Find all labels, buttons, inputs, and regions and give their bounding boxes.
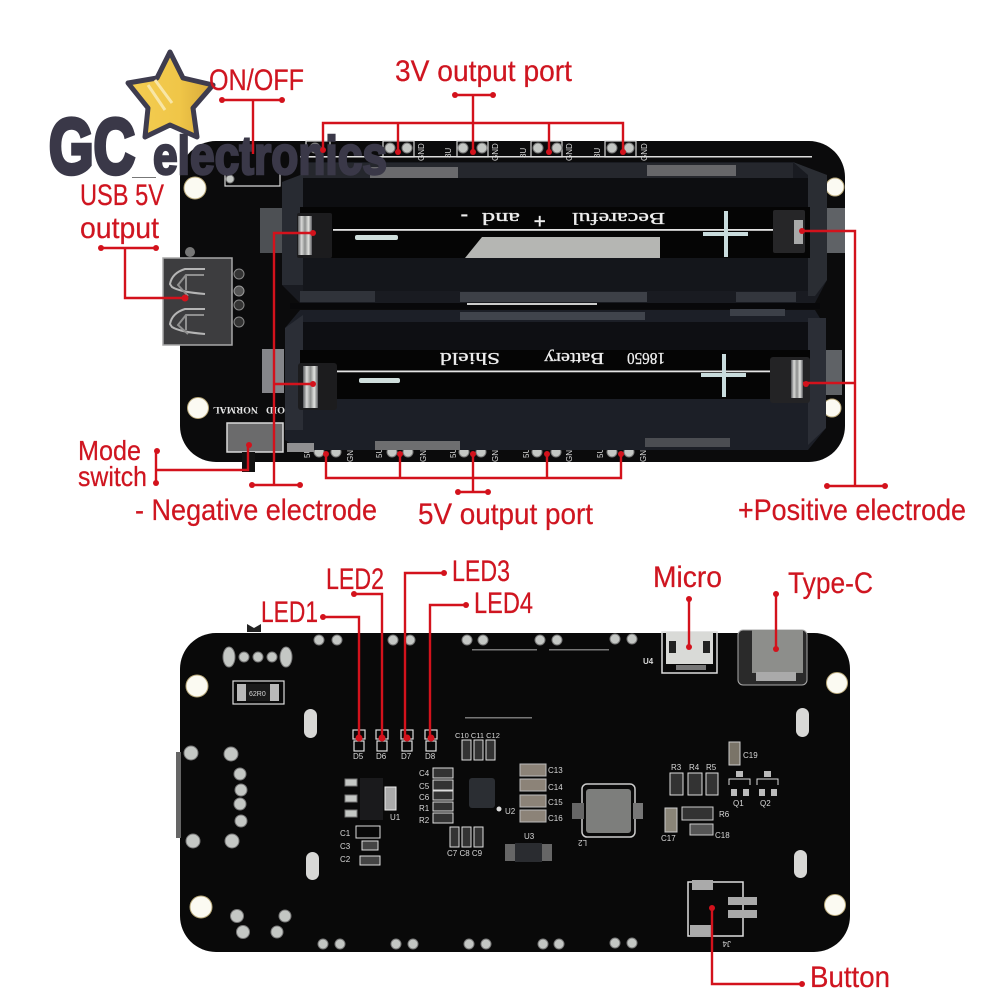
bottom output pads: GND [491, 444, 500, 462]
callout: LED2 [326, 563, 386, 742]
C10 C11 C12 [455, 731, 500, 760]
bottom output pads: GND [419, 444, 428, 462]
U2 QFN chip [469, 778, 516, 816]
C19: C19 [743, 751, 758, 760]
R6 C17 C18: R6 [719, 810, 730, 819]
holder gap [290, 303, 820, 309]
R3 R4 R5: R3 [671, 763, 682, 772]
18650 silk text [439, 349, 665, 368]
through-hole pads left [184, 647, 292, 938]
callout: 3V output port: 3V output port [395, 55, 573, 88]
C4 C5 C6 R1 R2: C5 [419, 782, 430, 791]
becareful silk text [461, 205, 665, 234]
callout: Micro [653, 561, 722, 650]
top output pads: 3U [519, 148, 528, 158]
LEDs D5-D8: D6 [376, 752, 387, 761]
C4 C5 C6 R1 R2: C6 [419, 793, 430, 802]
callout: Type-C: Type-C [788, 567, 873, 600]
C7 C8 C9: C7 C8 C9 [447, 849, 483, 858]
normal silk text: OID [265, 405, 285, 415]
R6 C17 C18: C18 [715, 831, 730, 840]
callout: 5V output port: 5V output port [418, 498, 594, 531]
callout: positive electrode: +Positive electrode [738, 494, 966, 527]
LEDs D5-D8 [353, 730, 437, 761]
callout: LED3: LED3 [452, 555, 510, 588]
top output pads: GND [417, 143, 426, 161]
contact clips [297, 210, 805, 258]
callout: mode switch [78, 435, 252, 492]
J4 button footprint [688, 880, 757, 948]
U3 chip: U3 [524, 832, 535, 841]
bottom output pads: 5U [303, 448, 312, 458]
side USB shell [176, 752, 181, 838]
callout: Button: Button [810, 961, 890, 994]
type-C port [738, 630, 807, 685]
callout: LED4 [428, 587, 533, 742]
LEDs D5-D8: D7 [401, 752, 412, 761]
callout: ON/OFF: ON/OFF [209, 64, 304, 97]
C4 C5 C6 R1 R2: R2 [419, 816, 430, 825]
R3 R4 R5 [670, 763, 718, 795]
callout: USB 5V output: output [80, 212, 160, 245]
C4 C5 C6 R1 R2: R1 [419, 804, 430, 813]
plus mark [703, 211, 748, 257]
C10 C11 C12: C10 C11 C12 [455, 731, 500, 740]
top output pads: 3U [593, 148, 602, 158]
callout: negative electrode [135, 230, 377, 527]
U1 regulator [345, 778, 401, 822]
becareful silk text: Becareful [572, 209, 665, 228]
contact clips [298, 357, 810, 410]
C1 C2 C3 [340, 826, 380, 865]
18650 silk text: Battery [543, 349, 604, 368]
on/off switch outline [225, 172, 280, 186]
bottom output pads: GND [346, 444, 355, 462]
top output pads: 3U [444, 148, 453, 158]
R3 R4 R5: R5 [706, 763, 717, 772]
C13 to C16: C14 [548, 783, 563, 792]
Q1 Q2: Q2 [760, 799, 771, 808]
becareful silk text: and [481, 209, 520, 228]
C19 [729, 742, 758, 765]
U3 chip [505, 832, 552, 862]
micro USB port [643, 632, 717, 673]
PCB top board [180, 141, 845, 462]
micro USB port: U4 [643, 657, 654, 666]
L2 inductor [572, 784, 643, 847]
terminal tabs [260, 208, 845, 395]
bottom output pads: GND [639, 444, 648, 462]
callout: LED1 [261, 596, 362, 742]
U2 QFN chip: U2 [505, 807, 516, 816]
top output pads [300, 141, 812, 161]
18650 silk text: Shield [439, 349, 500, 368]
minus mark [355, 235, 398, 240]
bottom output pads [303, 444, 648, 462]
C13 to C16: C16 [548, 814, 563, 823]
logo: GC electronics watermark [49, 52, 387, 190]
callout: positive electrode [738, 228, 966, 527]
icon: star [128, 52, 213, 137]
bottom output pads: GND [565, 444, 574, 462]
becareful silk text: + [533, 209, 546, 234]
normal silk text [213, 405, 285, 415]
C4 C5 C6 R1 R2: C4 [419, 769, 430, 778]
top output pads: GND [640, 143, 649, 161]
pad rows [314, 634, 637, 949]
LEDs D5-D8: D5 [353, 752, 364, 761]
top output pads: GND [491, 143, 500, 161]
C1 C2 C3: C3 [340, 842, 351, 851]
C7 C8 C9 [447, 827, 483, 858]
battery slot PCB [300, 207, 810, 258]
C13 to C16: C15 [548, 798, 563, 807]
minus mark [359, 378, 400, 383]
62R0 resistor [233, 681, 284, 704]
R6 C17 C18: C17 [661, 834, 676, 843]
C1 C2 C3: C1 [340, 829, 351, 838]
L2 inductor: L2 [578, 838, 587, 847]
Q1 Q2: Q1 [733, 799, 744, 808]
18650 silk text: 18650 [627, 349, 665, 368]
becareful silk text: - [461, 205, 468, 230]
U1 regulator: U1 [390, 813, 401, 822]
C1 C2 C3: C2 [340, 855, 351, 864]
battery holder 2 [285, 309, 826, 452]
bottom output pads: 5U [449, 448, 458, 458]
Q1 Q2 [729, 771, 778, 808]
bottom output pads: 5U [596, 448, 605, 458]
callout: mode switch: Mode [78, 435, 141, 466]
callout: USB 5V output: USB 5V [80, 179, 164, 212]
callout: negative electrode: - Negative electrode [135, 494, 377, 527]
callout: LED2: LED2 [326, 563, 384, 596]
bottom output pads: 5U [375, 448, 384, 458]
bottom output pads: 5U [522, 448, 531, 458]
holes [186, 672, 848, 918]
J4 button footprint: J4 [722, 939, 731, 948]
panel: bottom view of board [176, 624, 850, 952]
logo text [49, 102, 387, 190]
callout: Type-C [773, 567, 873, 652]
callout: LED1: LED1 [261, 596, 318, 629]
callout: LED3 [404, 555, 510, 742]
R3 R4 R5: R4 [689, 763, 700, 772]
mode switch [213, 405, 285, 472]
normal silk text: NORMAL [213, 405, 258, 415]
plus mark [701, 354, 746, 397]
oval slots [304, 708, 809, 880]
callout: mode switch: switch [78, 461, 147, 492]
callout: Button [709, 905, 890, 994]
nub [247, 624, 261, 632]
PCB bottom board [180, 633, 850, 952]
logo text: GC [49, 102, 135, 190]
C13 to C16: C13 [548, 766, 563, 775]
C13 to C16 [520, 764, 563, 823]
callout: 5V output port [323, 451, 624, 531]
battery holder 1 [282, 162, 827, 303]
callout: LED4: LED4 [474, 587, 533, 620]
callout: 3V output port [320, 55, 626, 155]
LEDs D5-D8: D8 [425, 752, 436, 761]
callout: Micro: Micro [653, 561, 722, 594]
top output pads: GND [565, 143, 574, 161]
callout: USB 5V output [80, 179, 188, 302]
R6 C17 C18 [661, 807, 730, 843]
USB-A 5V port [163, 247, 244, 345]
panel: top view of battery shield board [163, 141, 845, 472]
C4 C5 C6 R1 R2 [419, 768, 453, 825]
logo text: electronics [153, 126, 387, 186]
mounting holes top board [184, 177, 844, 418]
62R0 resistor: 62R0 [249, 691, 266, 698]
callout: ON/OFF [209, 64, 304, 154]
